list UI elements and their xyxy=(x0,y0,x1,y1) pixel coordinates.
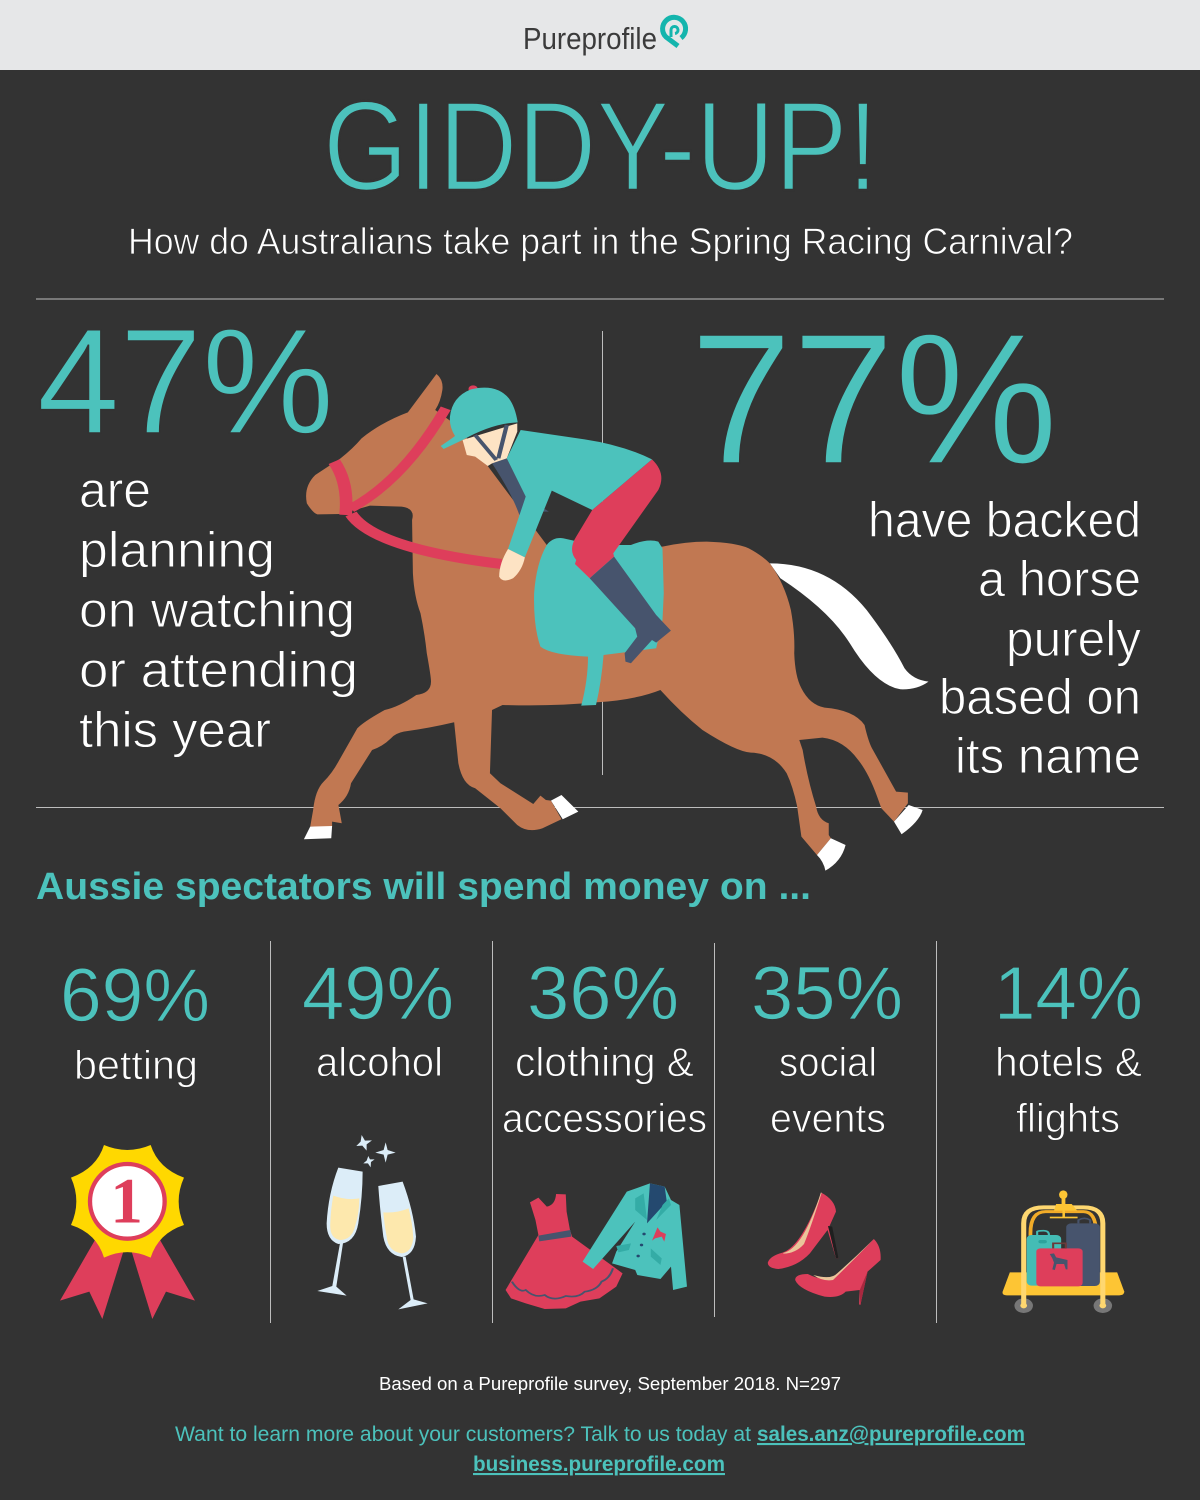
icon: dress and jacket xyxy=(506,1183,687,1309)
icon: champagne glasses xyxy=(317,1135,428,1309)
47% caption: or attending xyxy=(79,642,358,698)
clothing label: accessories xyxy=(502,1095,707,1141)
clothing label xyxy=(502,1039,707,1141)
35% figure: 35% xyxy=(751,951,903,1035)
icon: red high heels xyxy=(768,1193,881,1305)
column: alcohol xyxy=(302,951,454,1309)
47% figure: 47% xyxy=(37,297,334,465)
hotels and flights label: hotels & xyxy=(995,1039,1142,1085)
call to action: Want to learn more about your customers? Talk to us today at xyxy=(175,1423,751,1446)
helmet xyxy=(468,385,478,393)
bridle and reins xyxy=(334,408,501,564)
icon: logo pin xyxy=(663,17,686,46)
47% caption: are xyxy=(79,462,151,518)
header bar xyxy=(0,0,1200,70)
77% caption: have backed xyxy=(868,492,1141,548)
title: GIDDY-UP! xyxy=(323,75,878,217)
77% figure: 77% xyxy=(690,296,1058,503)
horse body xyxy=(306,374,908,855)
alcohol label: alcohol xyxy=(316,1039,443,1085)
hotels and flights label: flights xyxy=(1016,1095,1120,1141)
logo wordmark: Pureprofile xyxy=(523,21,657,56)
69% figure: 69% xyxy=(60,953,210,1037)
column: hotels and flights xyxy=(994,951,1143,1313)
helmet strap xyxy=(475,425,507,460)
hotels and flights label xyxy=(995,1039,1142,1141)
stat: 47% planning on watching xyxy=(37,297,358,758)
77% caption: its name xyxy=(955,728,1141,784)
jockey hand xyxy=(499,549,525,580)
call to action xyxy=(175,1423,1025,1476)
jockey face xyxy=(463,423,517,466)
column: betting xyxy=(60,953,210,1319)
47% caption xyxy=(79,462,358,758)
47% caption: on watching xyxy=(79,582,355,638)
77% caption xyxy=(868,492,1141,784)
77% caption: purely xyxy=(1006,611,1141,667)
stat: 77% backed a horse xyxy=(690,296,1141,784)
47% caption: planning xyxy=(79,522,275,578)
icon: first place rosette xyxy=(60,1145,195,1319)
call to action: business.pureprofile.com xyxy=(473,1453,725,1476)
jockey legs xyxy=(572,459,661,578)
36% figure: 36% xyxy=(527,951,679,1035)
clothing label: clothing & xyxy=(515,1039,694,1085)
icon: luggage cart xyxy=(1003,1190,1124,1313)
icon: first place rosette: 1 xyxy=(110,1165,143,1237)
horse hooves xyxy=(304,795,923,871)
section heading: Aussie spectators will spend money on ... xyxy=(36,866,811,908)
saddle cloth xyxy=(534,538,664,706)
survey source note: Based on a Pureprofile survey, September 2018. N=297 xyxy=(379,1374,841,1394)
77% caption: based on xyxy=(939,669,1141,725)
social events label xyxy=(770,1039,886,1141)
horse tail xyxy=(770,563,929,689)
jockey boot xyxy=(590,557,671,663)
47% caption: this year xyxy=(79,702,271,758)
illustration: horse and jockey xyxy=(304,374,929,871)
betting label: betting xyxy=(74,1042,198,1088)
column: social events xyxy=(751,951,903,1305)
section rules xyxy=(36,299,1164,1323)
subtitle: How do Australians take part in the Spring Racing Carnival? xyxy=(128,221,1073,262)
jockey far arm xyxy=(492,458,549,515)
column: clothing and accessories xyxy=(502,951,707,1309)
call to action: sales.anz@pureprofile.com xyxy=(757,1423,1025,1446)
jockey torso and arm xyxy=(507,430,652,557)
social events label: events xyxy=(770,1095,886,1141)
social events label: social xyxy=(779,1039,877,1085)
49% figure: 49% xyxy=(302,951,454,1035)
77% caption: a horse xyxy=(978,551,1141,607)
14% figure: 14% xyxy=(994,951,1143,1035)
